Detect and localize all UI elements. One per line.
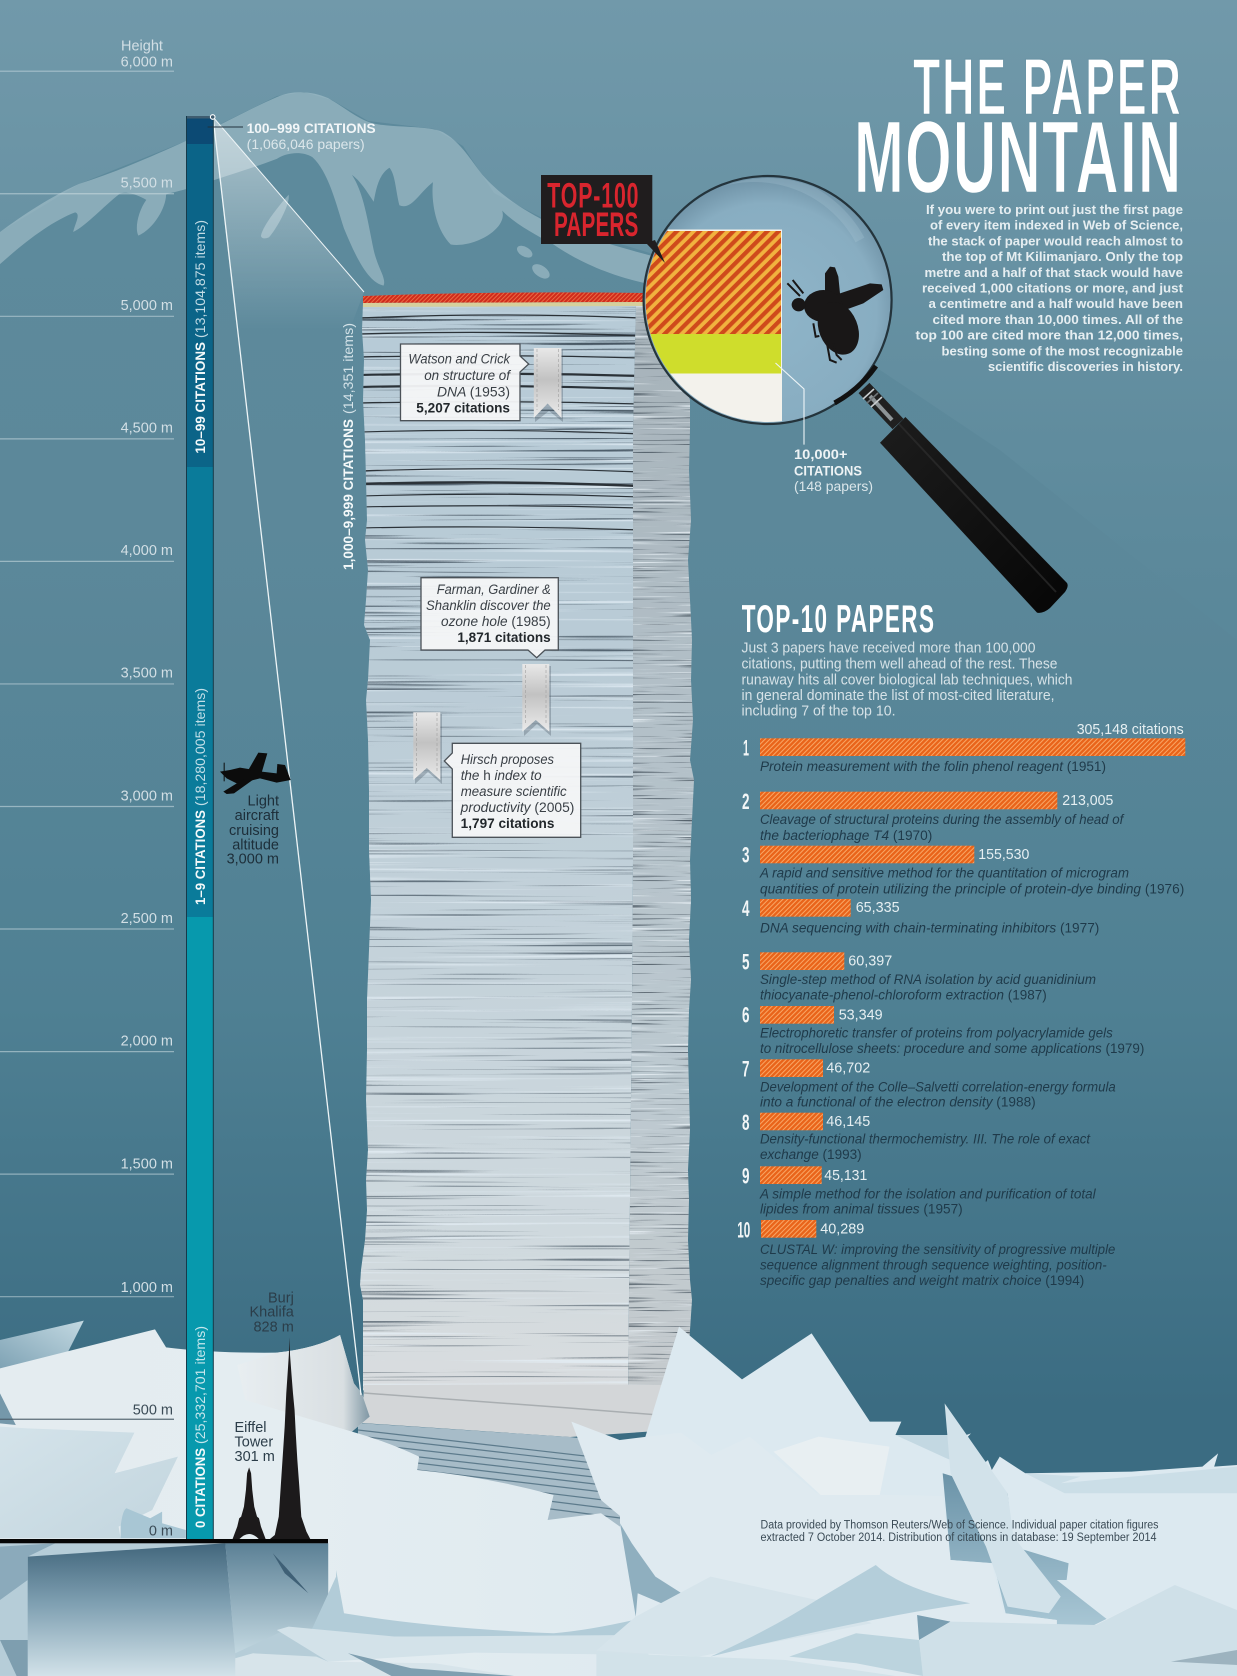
bottom sheet xyxy=(596,1653,895,1676)
callout 100-999 citations: 100–999 CITATIONS xyxy=(247,121,376,136)
callout: Hirsch h index: Hirsch proposes xyxy=(461,752,554,767)
left shadow curl xyxy=(620,1523,687,1617)
paper 10: 10 xyxy=(737,1217,750,1242)
paper 4: 4 xyxy=(742,896,750,921)
citation column xyxy=(186,116,214,1539)
back sheet xyxy=(0,1321,84,1370)
top-10 intro text: Just 3 papers have received more than 100,000 xyxy=(742,641,1036,657)
Burj Khalifa: Burj xyxy=(268,1291,294,1307)
paper 7: 46,702 xyxy=(826,1061,870,1077)
plane with altitude label: altitude xyxy=(232,837,279,853)
paper 3: A rapid and sensitive method for the quantitation of microgram xyxy=(759,865,1129,881)
callout: Hirsch h index: the h index to xyxy=(461,768,542,783)
paper 4: 65,335 xyxy=(856,900,900,916)
paper 10: specific gap penalties and weight matrix choice (1994) xyxy=(760,1273,1084,1289)
ruler labels: 3,000 m xyxy=(121,788,173,804)
shadow fold xyxy=(0,1393,16,1425)
callout: 10,000+ citations xyxy=(776,363,873,494)
dark pocket xyxy=(943,1473,1108,1628)
paper drift: left zone xyxy=(0,1321,652,1676)
paper 5 xyxy=(742,949,1096,1003)
paper 9: lipides from animal tissues (1957) xyxy=(760,1202,963,1218)
paper 7: 7 xyxy=(742,1057,750,1082)
callout: top-100 papers: PAPERS xyxy=(554,206,638,244)
paper 2: 213,005 xyxy=(1062,793,1113,809)
ground line xyxy=(0,1539,328,1543)
paper 2: Cleavage of structural proteins during the assembly of head of xyxy=(760,812,1125,828)
callout: Hirsch h index: productivity (2005) xyxy=(460,800,574,815)
background mountain silhouette xyxy=(0,92,1237,1000)
paper 7: into a functional of the electron density (1988) xyxy=(760,1095,1036,1111)
callout: Farman, Gardiner and Shanklin: ozone hole (1985) xyxy=(441,614,551,629)
ruler labels: 6,000 m xyxy=(121,54,173,70)
title: THE PAPER xyxy=(913,41,1181,132)
paper 4 xyxy=(742,896,1099,937)
icon: plane xyxy=(220,753,291,794)
height ruler xyxy=(0,38,174,1540)
paper 10 xyxy=(737,1217,1115,1289)
paper 3: quantities of protein utilizing the principle of protein-dye binding (1976) xyxy=(760,881,1184,897)
callout: Watson and Crick xyxy=(400,344,563,422)
stack base sheets xyxy=(358,1423,660,1540)
bottom sheet xyxy=(235,1653,514,1676)
leader wedge from column to stack xyxy=(213,117,364,1395)
paper 6: Electrophoretic transfer of proteins from polyacrylamide gels xyxy=(760,1025,1113,1041)
collar xyxy=(863,388,898,424)
title xyxy=(854,41,1181,215)
paper 9: 9 xyxy=(742,1163,750,1188)
paper 7: Development of the Colle–Salvetti correlation-energy formula xyxy=(760,1079,1116,1095)
paper 6: 53,349 xyxy=(839,1007,883,1023)
label 0 citations xyxy=(192,1326,208,1528)
Eiffel Tower: Eiffel xyxy=(234,1420,266,1436)
paper 8 xyxy=(742,1110,1091,1163)
paper 10: 40,289 xyxy=(820,1221,864,1237)
label 1,000-9,999 citations: 1,000–9,999 CITATIONS xyxy=(340,419,356,570)
intro text: besting some of the most recognizable xyxy=(942,343,1183,358)
paper 7 xyxy=(742,1057,1116,1111)
ruler labels: 5,500 m xyxy=(121,175,173,191)
label 1-9 citations xyxy=(192,688,208,905)
paper 10: CLUSTAL W: improving the sensitivity of progressive multiple xyxy=(760,1242,1115,1258)
box xyxy=(400,344,529,421)
paper 1: Protein measurement with the folin phenol reagent (1951) xyxy=(760,759,1106,775)
callout: Watson and Crick: on structure of xyxy=(424,368,511,383)
column segments xyxy=(186,116,214,1539)
ruler labels: 2,500 m xyxy=(121,911,173,927)
callout: Farman, Gardiner and Shanklin: 1,871 citations xyxy=(457,630,551,645)
ruler lines xyxy=(0,71,174,1419)
intro text xyxy=(916,202,1184,374)
sheet by stack right xyxy=(571,1422,633,1527)
paper 8: exchange (1993) xyxy=(760,1147,862,1163)
paper 3: 3 xyxy=(742,843,750,868)
callout: Hirsch h index: 1,797 citations xyxy=(461,816,554,831)
paper 5: thiocyanate-phenol-chloroform extraction (1987) xyxy=(760,987,1047,1003)
stack side face xyxy=(628,306,694,1385)
ribbon xyxy=(534,348,563,422)
Eiffel Tower xyxy=(232,1420,275,1539)
label 0 citations: (25,332,701 items) xyxy=(192,1326,208,1444)
paper 2 xyxy=(742,789,1125,844)
plane with altitude label xyxy=(220,753,291,867)
ruler labels: 3,500 m xyxy=(121,666,173,682)
plane with altitude label: cruising xyxy=(229,823,279,839)
paper 1 xyxy=(743,722,1185,775)
paper 2: 2 xyxy=(742,789,750,814)
paper 10: sequence alignment through sequence weighting, position- xyxy=(760,1257,1107,1273)
curled sheet near stack xyxy=(237,1335,370,1432)
lower band sheet xyxy=(277,1627,648,1662)
foreground sheet xyxy=(620,1433,1237,1676)
paper 5: 60,397 xyxy=(848,954,892,970)
callout: 10,000+ citations: 10,000+ xyxy=(794,447,848,462)
source note: extracted 7 October 2014. Distribution of citations in database: 19 September 2014 xyxy=(760,1532,1157,1544)
callout: 10,000+ citations: (148 papers) xyxy=(794,479,873,494)
box xyxy=(421,578,558,658)
top-10 intro text: runaway hits all cover biological lab techniques, which xyxy=(742,672,1072,688)
ruler labels: Height xyxy=(121,38,163,54)
paper 5: 5 xyxy=(742,949,750,974)
callout: top-100 papers xyxy=(541,175,665,263)
spike sheet xyxy=(945,1403,1061,1613)
mountain snow cap xyxy=(0,92,656,286)
Burj Khalifa xyxy=(249,1291,310,1539)
lens rim xyxy=(644,176,892,424)
label 10-99 citations: (13,104,875 items) xyxy=(192,220,208,338)
ruler labels: 2,000 m xyxy=(121,1034,173,1050)
label 1,000-9,999 citations: (14,351 items) xyxy=(340,323,356,414)
intro text: If you were to print out just the first page xyxy=(926,202,1183,217)
ruler labels: 4,000 m xyxy=(121,543,173,559)
Burj Khalifa: 828 m xyxy=(253,1319,294,1335)
magnifying glass xyxy=(640,176,1068,613)
intro text: a centimetre and a half would have been xyxy=(928,296,1183,311)
ruler labels: 1,000 m xyxy=(121,1280,173,1296)
title: MOUNTAIN xyxy=(854,100,1181,215)
label 1,000-9,999 citations xyxy=(340,323,356,570)
paper 1: 1 xyxy=(743,736,749,761)
paper 8: 46,145 xyxy=(826,1114,870,1130)
sheet peaks xyxy=(620,1327,1237,1676)
paper 2: the bacteriophage T4 (1970) xyxy=(760,828,932,844)
top-10 intro text xyxy=(742,641,1072,719)
paper drift: right back sheets xyxy=(620,1327,1237,1676)
icon: tower xyxy=(232,1467,266,1539)
label 1-9 citations: 1–9 CITATIONS xyxy=(192,810,208,905)
callout: Hirsch h index xyxy=(413,712,581,837)
icon: bee silhouette xyxy=(787,267,883,363)
Eiffel Tower: Tower xyxy=(234,1435,273,1451)
bar chart: top-10 papers xyxy=(737,722,1185,1289)
intro text: of every item indexed in Web of Science, xyxy=(930,218,1183,233)
ruler labels: 4,500 m xyxy=(121,420,173,436)
intro text: the stack of paper would reach almost to xyxy=(928,233,1183,248)
intro text: received 1,000 citations or more, and just xyxy=(922,280,1184,296)
under-ground block xyxy=(0,1543,328,1676)
icon: tower xyxy=(270,1337,310,1539)
plane with altitude label: aircraft xyxy=(235,808,279,824)
callout 100-999 citations: (1,066,046 papers) xyxy=(247,137,365,152)
paper 5: Single-step method of RNA isolation by acid guanidinium xyxy=(760,972,1096,988)
source note xyxy=(760,1519,1159,1544)
paper 8: Density-functional thermochemistry. III. The role of exact xyxy=(760,1131,1091,1147)
callout: Watson and Crick: Watson and Crick xyxy=(408,352,511,367)
paper 8: 8 xyxy=(742,1110,750,1135)
main sheet xyxy=(0,1329,652,1676)
paper 9: 45,131 xyxy=(824,1168,867,1184)
callout: Watson and Crick: DNA (1953) xyxy=(437,384,510,399)
label 10-99 citations: 10–99 CITATIONS xyxy=(192,342,208,454)
lens contents xyxy=(640,177,860,430)
ruler labels: 1,500 m xyxy=(121,1156,173,1172)
ribbon xyxy=(413,712,442,784)
label 0 citations: 0 CITATIONS xyxy=(192,1448,208,1528)
red top layer xyxy=(363,292,644,307)
box xyxy=(444,743,581,837)
paper 9 xyxy=(742,1163,1097,1218)
ruler labels xyxy=(121,38,173,1540)
bottom-right sheet xyxy=(919,1585,1237,1676)
callout: 10,000+ citations: CITATIONS xyxy=(794,464,862,478)
top-10 intro text: citations, putting them well ahead of the rest. These xyxy=(742,656,1058,672)
paper 6 xyxy=(742,1003,1144,1057)
ruler labels: 5,000 m xyxy=(121,298,173,314)
lower shadow xyxy=(789,1633,923,1676)
paper 9: A simple method for the isolation and purification of total xyxy=(759,1186,1097,1202)
Eiffel Tower: 301 m xyxy=(234,1449,275,1465)
shadow under front sheet xyxy=(308,1570,648,1637)
foreground left sheet xyxy=(596,1577,872,1657)
paper 6: to nitrocellulose sheets: procedure and some applications (1979) xyxy=(760,1041,1144,1057)
lower-left sheet xyxy=(0,1427,178,1538)
paper 3 xyxy=(742,843,1184,897)
intro text: the top of Mt Kilimanjaro. Only the top xyxy=(942,249,1183,264)
stack front face xyxy=(350,300,650,1400)
callout: Farman, Gardiner and Shanklin: Shanklin discover the xyxy=(426,598,551,613)
bottom right shadow xyxy=(1171,1650,1237,1665)
bright sheet highlight xyxy=(773,1437,890,1495)
Burj Khalifa: Khalifa xyxy=(249,1305,295,1321)
ruler labels: 0 m xyxy=(149,1524,173,1540)
paper 4: DNA sequencing with chain-terminating inhibitors (1977) xyxy=(760,921,1099,937)
paper drift: right front sheets xyxy=(596,1523,1237,1676)
paper stack xyxy=(350,292,700,1540)
label 10-99 citations xyxy=(192,220,208,454)
source note: Data provided by Thomson Reuters/Web of Science. Individual paper citation figures xyxy=(760,1519,1159,1531)
stack base slab xyxy=(362,1385,672,1437)
curled sheet near zero xyxy=(121,1508,186,1538)
heading: top-10 papers: TOP-10 PAPERS xyxy=(742,597,934,641)
ribbon xyxy=(522,664,551,736)
top-10 intro text: including 7 of the top 10. xyxy=(742,703,896,719)
paper 6: 6 xyxy=(742,1003,750,1028)
callout: Hirsch h index: measure scientific xyxy=(461,784,567,799)
lens xyxy=(644,176,892,424)
callout: Farman, Gardiner and Shanklin: Farman, Gardiner & xyxy=(437,582,551,597)
label 1-9 citations: (18,280,005 items) xyxy=(192,688,208,806)
callout: top-100 papers: TOP-100 xyxy=(547,177,638,216)
callout 100-999 citations xyxy=(208,115,376,152)
handle xyxy=(880,417,1068,613)
shaded curled sheet xyxy=(711,1565,970,1657)
distant right sheet xyxy=(1025,1467,1237,1493)
dark fold xyxy=(917,1615,951,1640)
plane with altitude label: Light xyxy=(248,794,279,810)
intro text: cited more than 10,000 times. All of the xyxy=(932,312,1183,327)
paper 3: 155,530 xyxy=(978,847,1029,863)
callout: Watson and Crick: 5,207 citations xyxy=(416,400,510,416)
paper 1: 305,148 citations xyxy=(1077,722,1184,738)
callout: Farman, Gardiner and Shanklin xyxy=(421,578,558,736)
ruler labels: 500 m xyxy=(133,1402,173,1418)
intro text: scientific discoveries in history. xyxy=(988,359,1183,374)
tinted back sheet xyxy=(895,1435,982,1473)
top-10 intro text: in general dominate the list of most-cited literature, xyxy=(742,688,1054,704)
intro text: metre and a half of that stack would have xyxy=(924,265,1183,280)
plane with altitude label: 3,000 m xyxy=(227,851,279,867)
intro text: top 100 are cited more than 12,000 times, xyxy=(916,328,1183,343)
